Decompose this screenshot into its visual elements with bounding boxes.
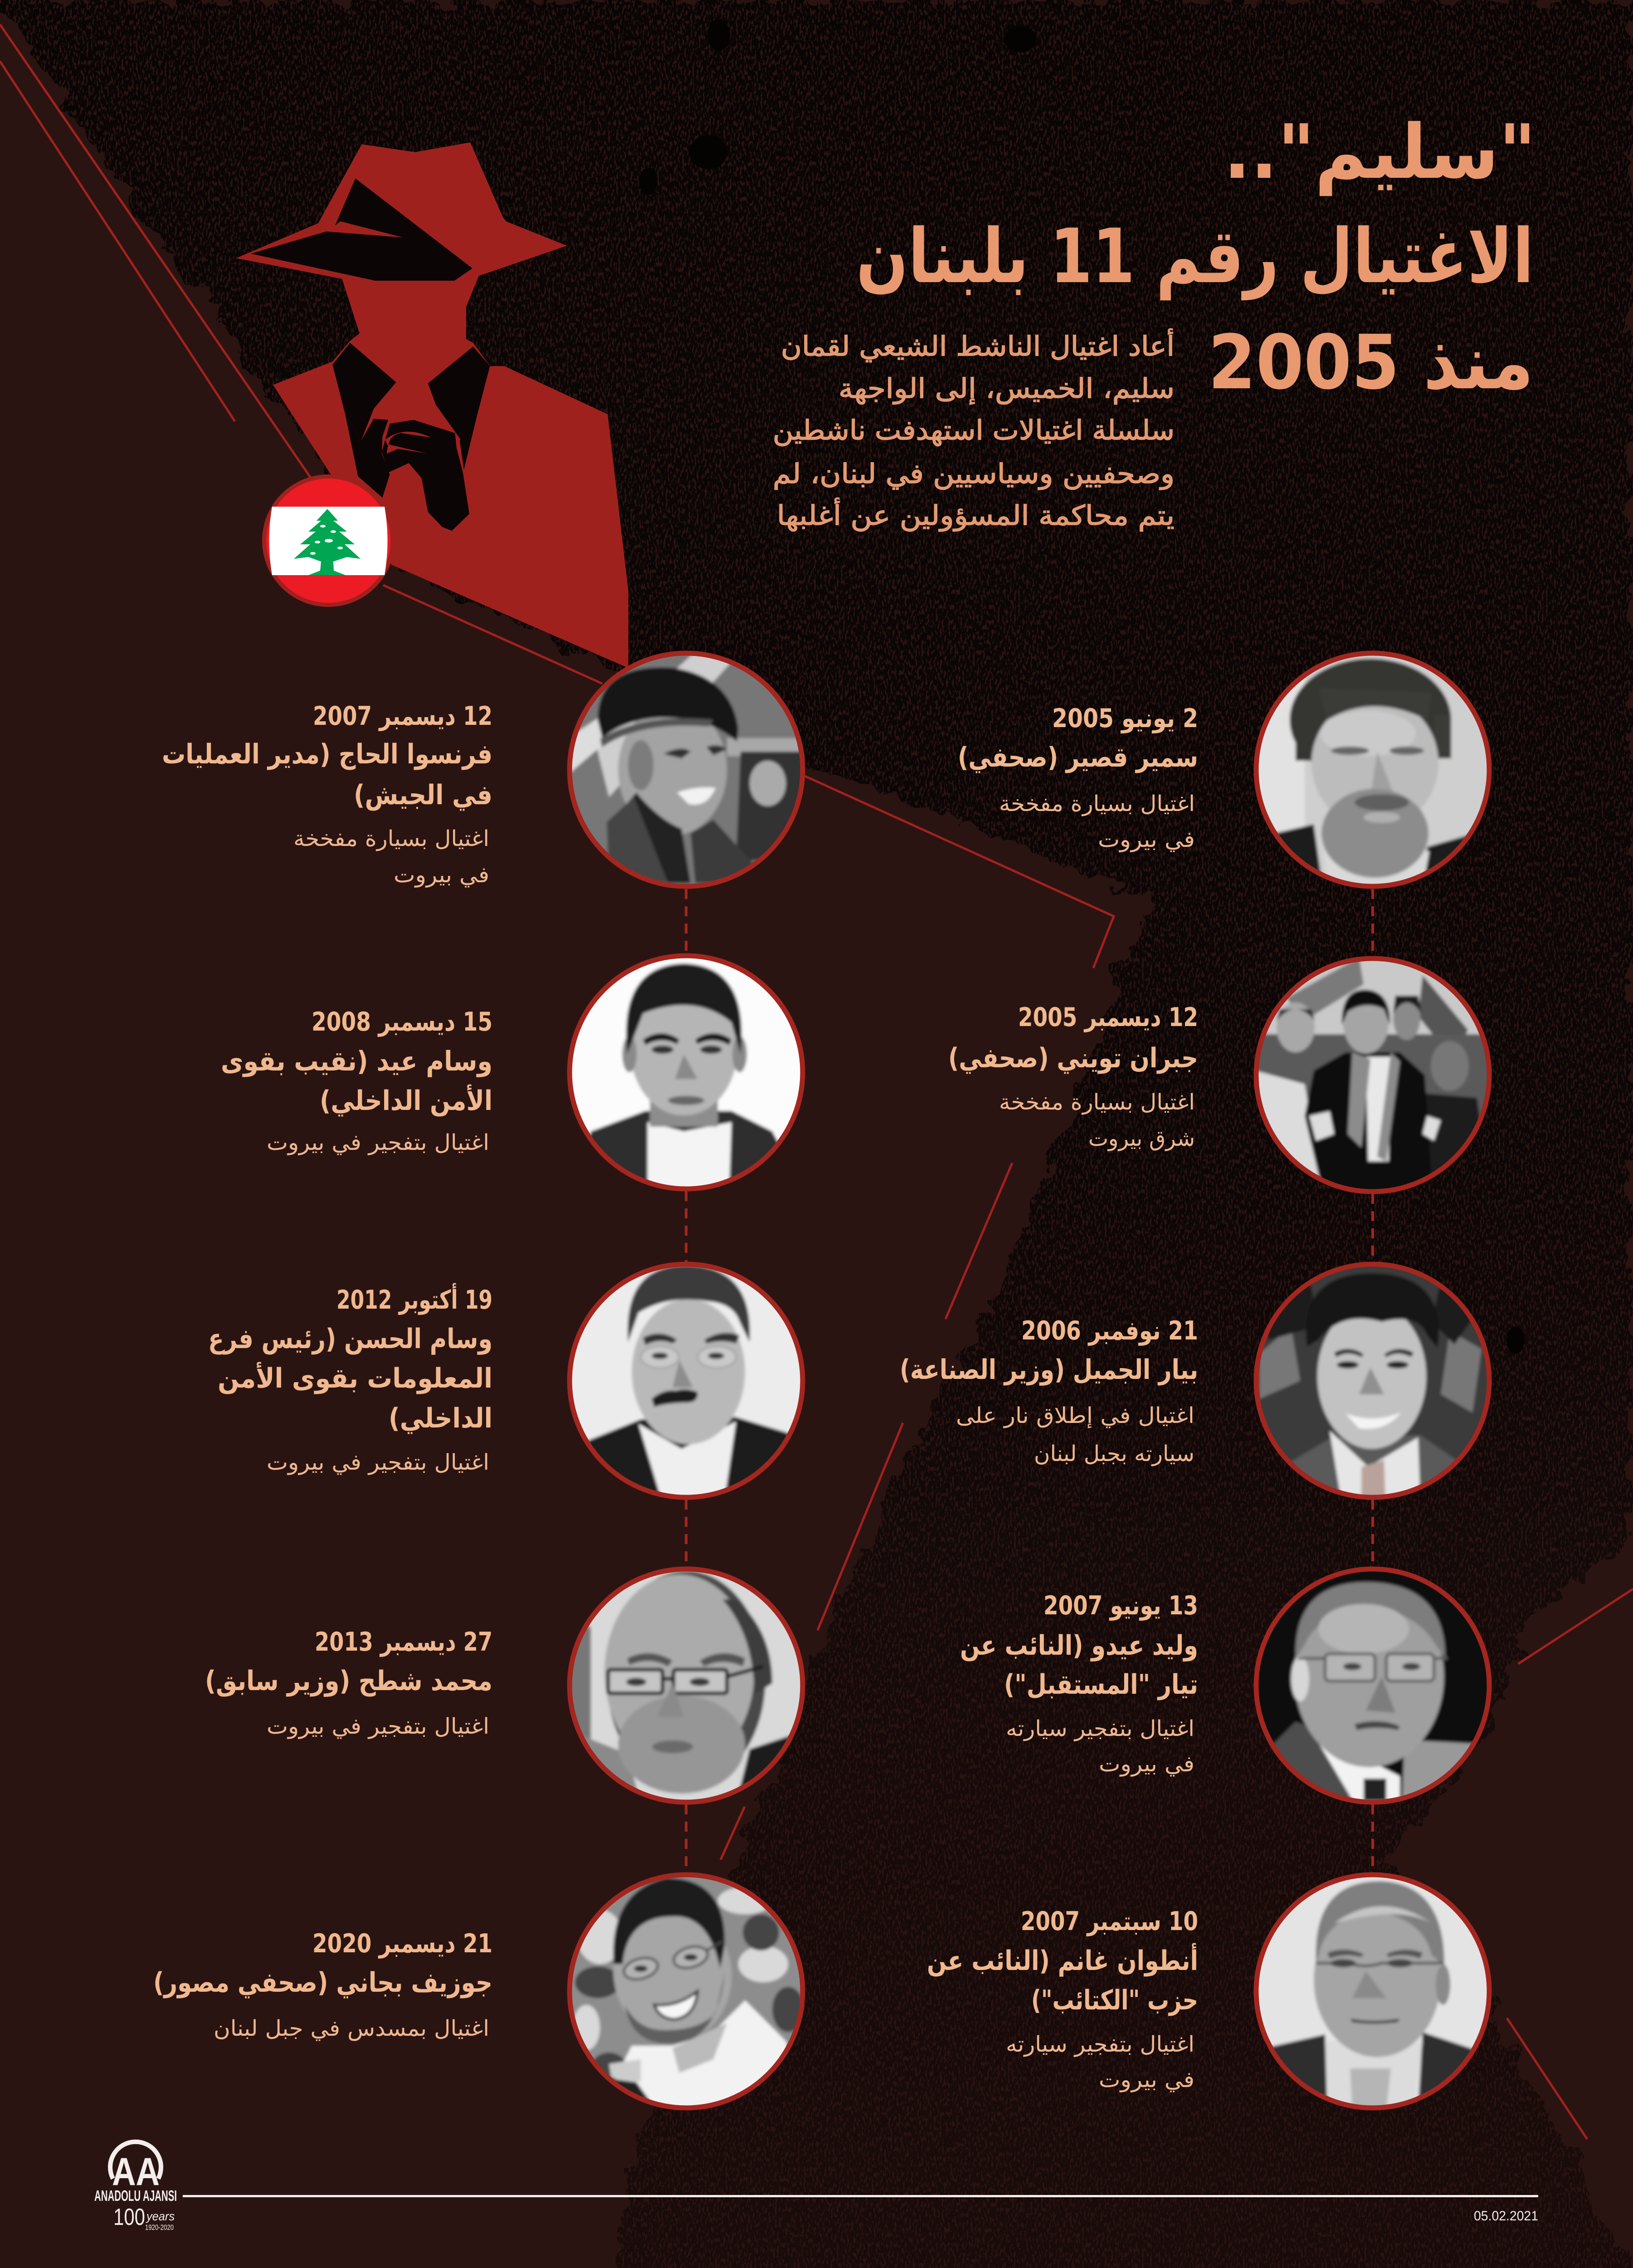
description: في بيروت [1099, 1751, 1194, 1777]
logo: Anadolu Ajansi: ANADOLU AJANSI [94, 2187, 177, 2204]
title: "سليم".. [1224, 108, 1536, 196]
logo: Anadolu Ajansi: AA [112, 2150, 160, 2194]
name: المعلومات بقوى الأمن [218, 1362, 492, 1394]
title: منذ 2005 [1208, 319, 1534, 406]
text: Walid Eido [960, 1591, 1198, 1777]
description: اغتيال بتفجير في بيروت [267, 1130, 489, 1155]
description: اغتيال بمسدس في جبل لبنان [214, 2016, 489, 2041]
name: في الجيش) [354, 779, 492, 811]
logo: Anadolu Ajansi: 100 [113, 2204, 145, 2230]
portrait: Walid Eido [1255, 1568, 1491, 1804]
description [1006, 1716, 1194, 1777]
text: Gebran Tueni [948, 1002, 1198, 1151]
description: شرق بيروت [1088, 1126, 1195, 1151]
name: بيار الجميل (وزير الصناعة) [900, 1354, 1198, 1386]
portrait: Joseph Bejjani [568, 1873, 804, 2109]
portrait: Antoine Ghanem [1255, 1873, 1491, 2109]
name: محمد شطح (وزير سابق) [205, 1665, 492, 1697]
name: وليد عيدو (النائب عن [960, 1630, 1198, 1662]
portrait: Wissam al-Hassan [568, 1263, 804, 1499]
name: جوزيف بجاني (صحفي مصور) [153, 1967, 492, 1999]
portrait: Samir Qasir [1255, 652, 1491, 888]
date: 2 يونيو 2005 [1052, 704, 1198, 733]
name: جبران تويني (صحفي) [948, 1042, 1198, 1074]
name: وسام الحسن (رئيس فرع [208, 1323, 492, 1355]
footer date: 05.02.2021 [1474, 2209, 1538, 2224]
name: سمير قصير (صحفي) [958, 742, 1198, 773]
footer rule [183, 2195, 1538, 2197]
date: 21 نوفمبر 2006 [1021, 1316, 1198, 1346]
intro paragraph: يتم محاكمة المسؤولين عن أغلبها [777, 498, 1175, 532]
text: Wissam al-Hassan [208, 1283, 492, 1475]
text: Wissam Eid [221, 1007, 492, 1155]
intro paragraph: أعاد اغتيال الناشط الشيعي لقمان [781, 328, 1175, 362]
text: Pierre Gemayel [900, 1316, 1198, 1466]
intro paragraph: سليم، الخميس، إلى الواجهة [838, 373, 1175, 405]
portrait: Francois al-Hajj [568, 652, 804, 888]
title: الاغتيال رقم 11 بلبنان [856, 213, 1534, 301]
date: 15 ديسمبر 2008 [312, 1007, 492, 1037]
description: في بيروت [1099, 2067, 1194, 2092]
text: Francois al-Hajj [162, 701, 492, 888]
description [1006, 2032, 1194, 2092]
name: الداخلي) [389, 1403, 492, 1434]
logo: Anadolu Ajansi: 1920-2020 [145, 2223, 174, 2232]
description: اغتيال في إطلاق نار على [956, 1403, 1194, 1428]
name: الأمن الداخلي) [320, 1084, 492, 1117]
date: 13 يونيو 2007 [1043, 1591, 1198, 1621]
description: اغتيال بتفجير سيارته [1006, 1716, 1194, 1741]
date: 27 ديسمبر 2013 [315, 1627, 492, 1657]
title [856, 108, 1536, 406]
name: أنطوان غانم (النائب عن [927, 1943, 1198, 1977]
description: اغتيال بسيارة مفخخة [999, 1090, 1195, 1115]
name: حزب "الكتائب") [1031, 1984, 1198, 2016]
text: Antoine Ghanem [927, 1906, 1198, 2092]
description: اغتيال بتفجير في بيروت [267, 1714, 489, 1739]
description [999, 1090, 1195, 1151]
portrait: Pierre Gemayel [1255, 1263, 1491, 1499]
name: وسام عيد (نقيب بقوى [221, 1046, 492, 1077]
description: سيارته بجبل لبنان [1034, 1441, 1194, 1466]
intro paragraph: سلسلة اغتيالات استهدفت ناشطين [773, 415, 1175, 446]
text: Mohamad Chatah [205, 1627, 492, 1739]
description: اغتيال بتفجير في بيروت [267, 1450, 489, 1475]
name [927, 1943, 1198, 2016]
name: فرنسوا الحاج (مدير العمليات [162, 738, 492, 770]
description: في بيروت [1098, 827, 1195, 852]
description [956, 1403, 1194, 1466]
portrait: Gebran Tueni [1255, 957, 1491, 1193]
name [162, 738, 492, 811]
date: 12 ديسمبر 2007 [313, 701, 492, 731]
portrait: Mohamad Chatah [568, 1568, 804, 1804]
date: 10 سبتمبر 2007 [1021, 1906, 1198, 1936]
description [999, 791, 1195, 852]
logo: Anadolu Ajansi: years [146, 2209, 175, 2223]
silhouette: man in hat [236, 142, 629, 668]
name: تيار "المستقبل") [1004, 1669, 1198, 1701]
name [221, 1046, 492, 1117]
intro paragraph: وصحفيين وسياسيين في لبنان، لم [773, 458, 1175, 490]
timeline connectors [686, 889, 1373, 1872]
name [208, 1323, 492, 1434]
text: Joseph Bejjani [153, 1929, 492, 2041]
date: 19 أكتوبر 2012 [336, 1283, 492, 1315]
description [293, 826, 489, 888]
intro paragraph [773, 328, 1175, 532]
date: 21 ديسمبر 2020 [312, 1929, 492, 1959]
logo: Anadolu Ajansi [94, 2142, 177, 2232]
portrait: Wissam Eid [568, 954, 804, 1190]
Lebanese flag badge [262, 474, 395, 607]
description: في بيروت [394, 862, 489, 888]
description: اغتيال بتفجير سيارته [1006, 2032, 1194, 2057]
description: اغتيال بسيارة مفخخة [293, 826, 489, 851]
date: 12 ديسمبر 2005 [1018, 1002, 1198, 1032]
name [960, 1630, 1198, 1701]
text: Samir Qasir [958, 704, 1198, 852]
description: اغتيال بسيارة مفخخة [999, 791, 1195, 816]
ink blots [639, 19, 1525, 1354]
